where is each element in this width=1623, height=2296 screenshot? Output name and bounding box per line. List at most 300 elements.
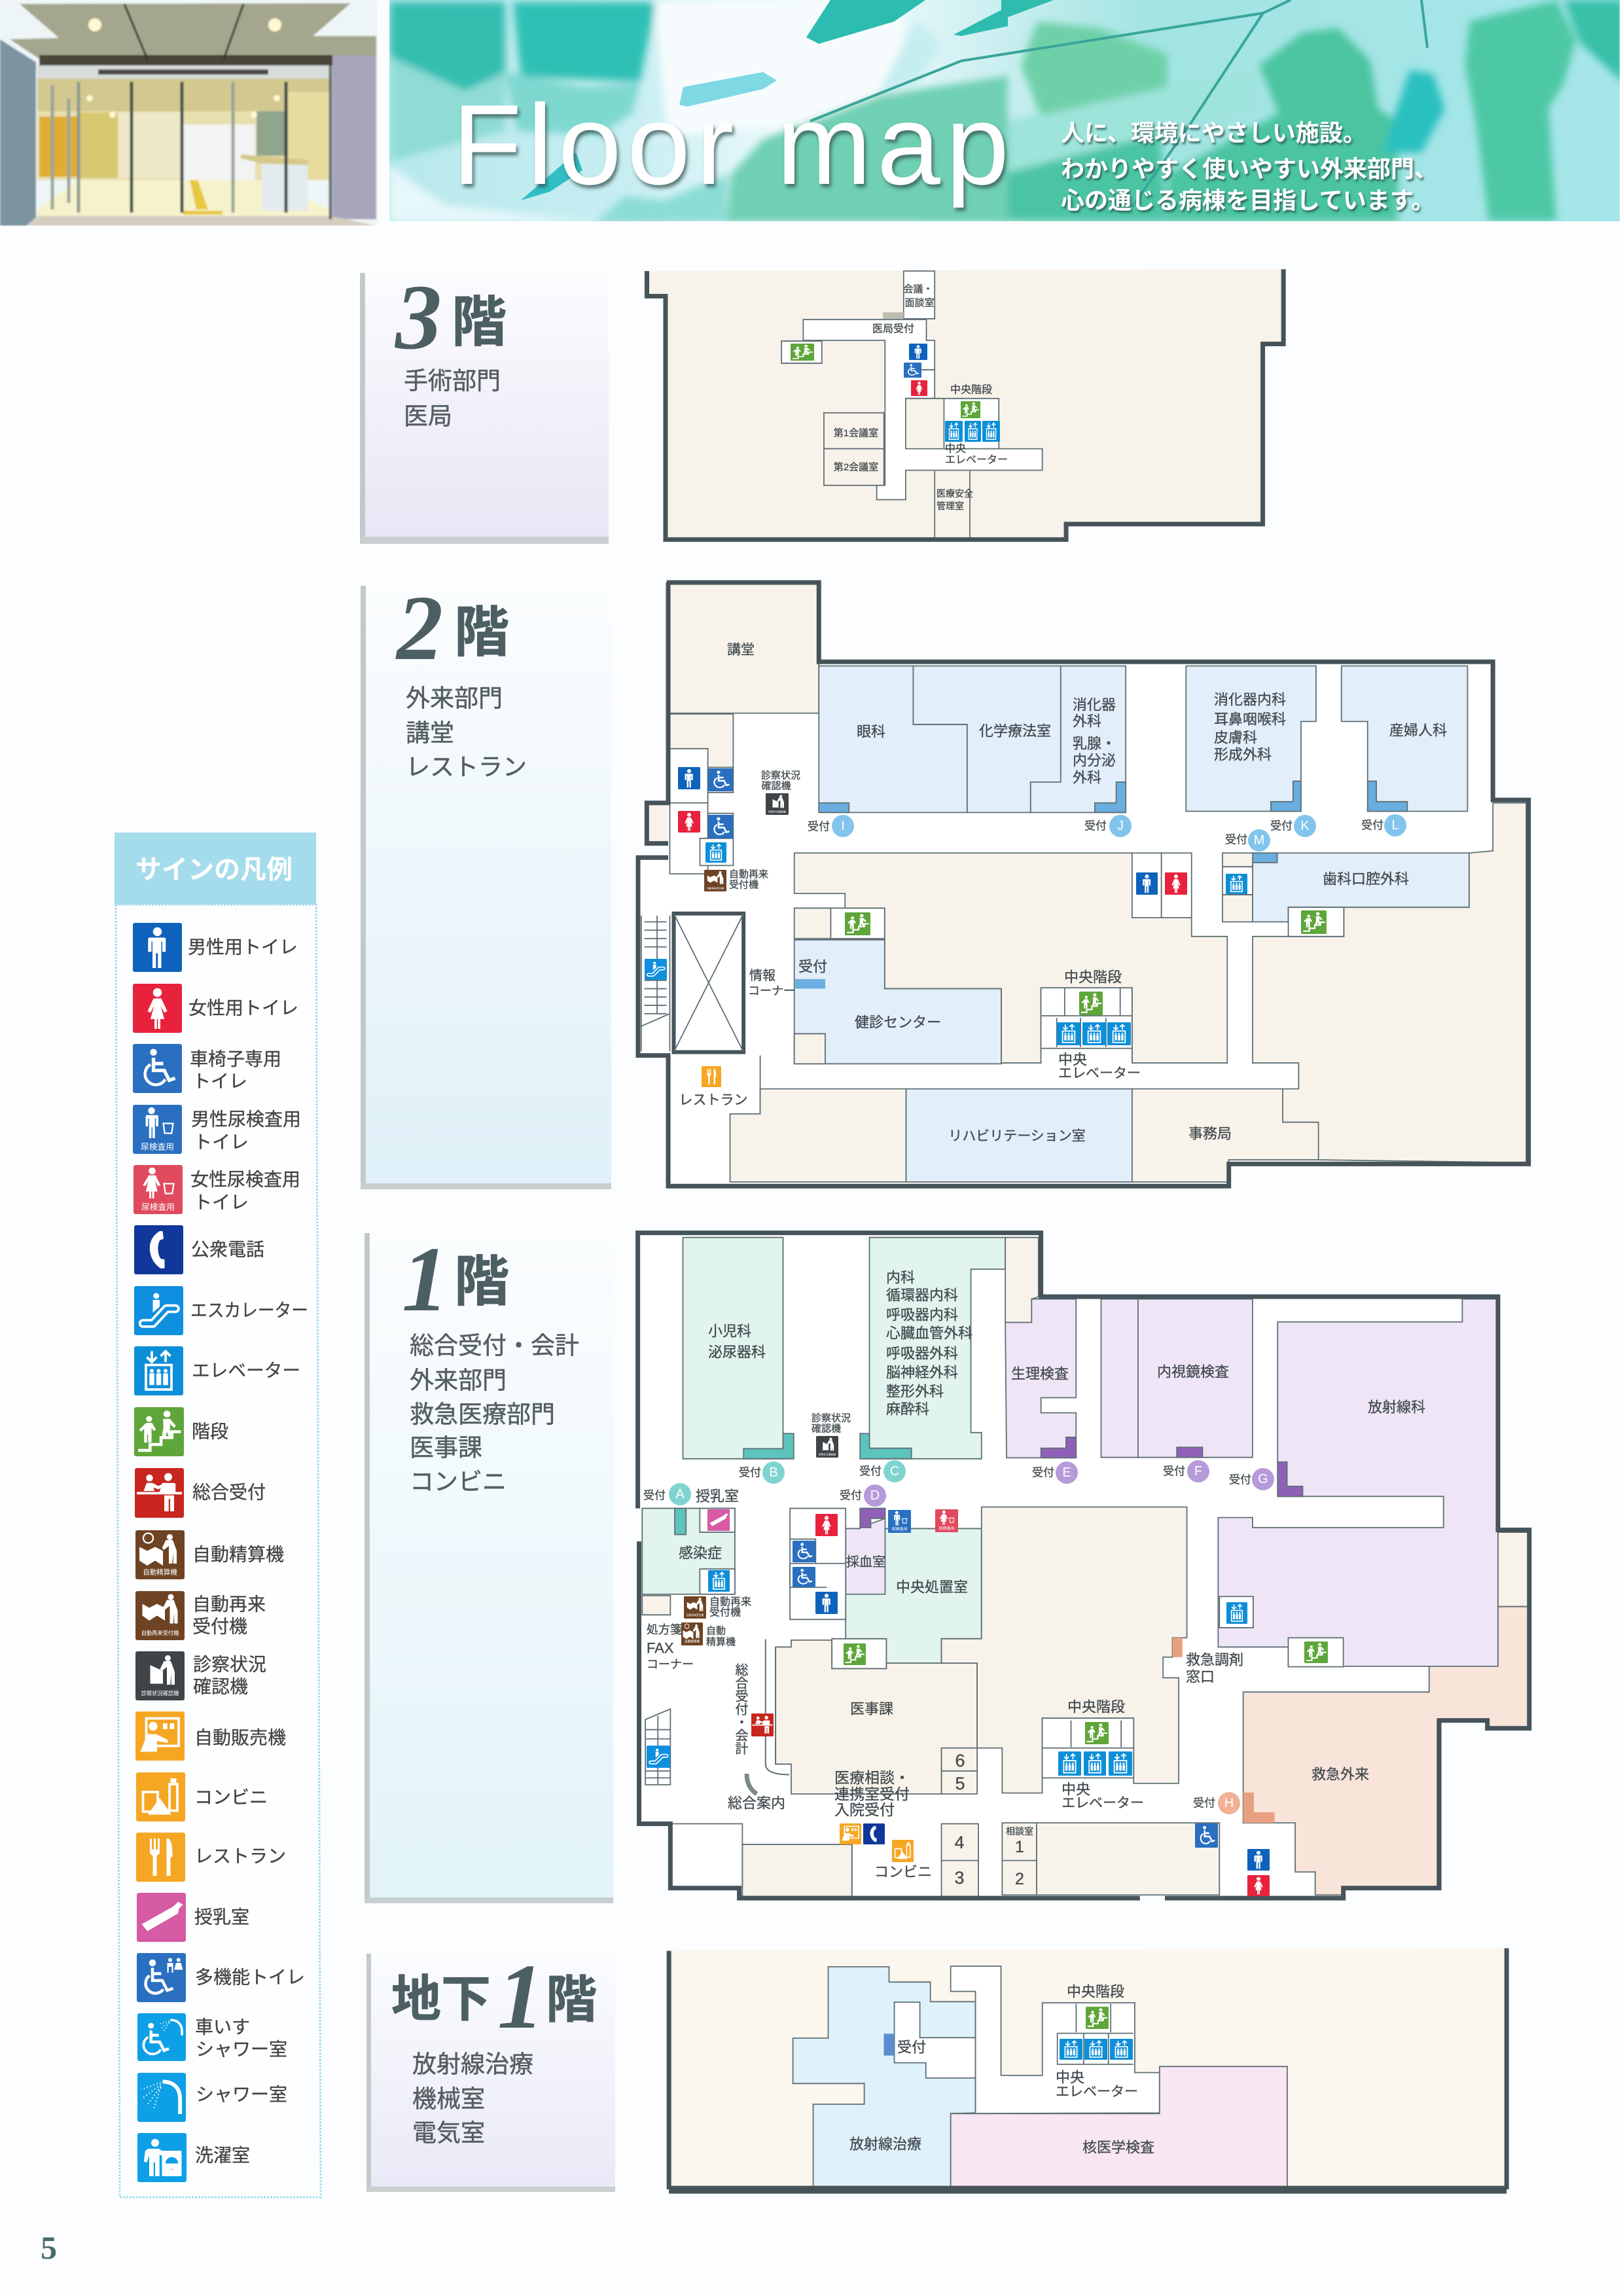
icon: elevator 2 [965,421,981,442]
floor plan: 3F [647,269,1283,539]
reception marker F [1163,1460,1209,1482]
room shapes 2F [638,583,1529,1186]
label 救急調剤窓口 [1186,1652,1243,1685]
heading: 3階: 3 [394,265,442,368]
legend: women's toilet: 女性用トイレ [188,997,298,1018]
basement departments [412,2051,533,2147]
icon: status kiosk [766,793,789,815]
reception marker B: B [769,1465,778,1480]
heading: 地下1階 [391,1945,597,2048]
legend: men's urine-test toilet: 男性尿検査用 [191,1109,301,1130]
icon: elevator 1 [1060,2039,1082,2060]
legend: auto payment: 自動精算機 [192,1545,284,1564]
label 第2会議室: 第2会議室 [834,461,878,473]
heading: 1階 [402,1227,509,1331]
label 自動再来受付機 [709,1596,751,1618]
icon: elevator east [1226,1602,1247,1624]
room shapes 3F [647,269,1283,539]
legend: escalator [134,1286,308,1335]
legend: multipurpose toilet [137,1953,305,2002]
reception marker J: 受付 [1084,819,1107,833]
legend: wheelchair shower [137,2013,287,2061]
legend: re-visit kiosk: 受付機 [192,1617,247,1636]
floor 1 departments: 医事課 [410,1435,482,1461]
label 中央エレベーター [1056,2070,1138,2100]
legend: elevator: エレベーター [192,1360,300,1381]
icon: central stairs [1085,1722,1109,1744]
icon: stairs [844,1643,866,1665]
legend: re-visit kiosk [135,1591,266,1640]
icon: escalator [645,959,667,980]
label 中央エレベーター: エレベーター [1061,1796,1144,1810]
header photo: hospital entrance [0,0,378,226]
legend: reception: 総合受付 [192,1482,266,1503]
label 核医学検査: 核医学検査 [1082,2139,1154,2156]
reception marker A [643,1483,691,1505]
legend: restaurant [136,1833,286,1882]
label 総合案内: 総合案内 [728,1795,785,1812]
label 小児科・泌尿器科: 小児科 [708,1323,751,1339]
label 中央エレベーター: 中央 [1056,2070,1084,2085]
legend: nursing room: 授乳室 [194,1907,249,1927]
icon: men's urine-test toilet [888,1510,911,1533]
icon: accessible toilet [708,768,733,791]
legend: stairs: 階段 [192,1422,228,1441]
label 会議・面談室: 会議・ [903,283,933,295]
label 小児科・泌尿器科 [708,1323,766,1360]
icon: vending machine [840,1823,861,1844]
label 処方箋FAXコーナー: コーナー [647,1658,694,1671]
label 相談室1-2: 相談室 [1006,1826,1033,1837]
label 中央エレベーター [1058,1051,1141,1081]
legend: status kiosk: 確認機 [193,1677,248,1696]
label 消化器内科ほか: 皮膚科 [1214,729,1257,746]
label 自動再来受付機: 自動再来 [709,1596,751,1607]
legend: accessible toilet [133,1044,281,1093]
page number: 5 [41,2229,57,2266]
header title: Floor map [452,81,1009,208]
legend header: サインの凡例 [135,855,293,884]
legend: shower room [137,2073,287,2122]
header tagline: 人に、環境にやさしい施設。 [1061,119,1366,147]
basement departments: 電気室 [412,2119,485,2147]
panel: floor 1 heading [365,1227,613,1903]
label 医療相談・連携室受付・入院受付: 入院受付 [834,1801,895,1818]
icon: elevator west [705,842,726,863]
icon: elevator 3 [982,421,1000,442]
header banner: leaves [389,0,1623,223]
icon: women's toilet [815,1514,838,1536]
icon: auto payment [681,1623,703,1645]
label 中央階段: 中央階段 [1064,969,1122,986]
label 自動再来受付機: 自動再来 [729,869,768,880]
floor plan: 1F [638,1233,1529,1898]
floor plan: 2F [638,583,1529,1186]
panel: sign legend [115,833,321,2197]
legend: re-visit kiosk: 自動再来 [192,1594,266,1614]
label 自動再来受付機: 受付機 [729,880,758,890]
legend: laundry [137,2133,250,2182]
reception marker G: 受付 [1229,1474,1251,1486]
icon: stairs west [791,344,814,361]
icon: public phone [863,1823,885,1844]
label 相談室1-2: 2 [1015,1870,1024,1888]
floor 2 departments: 講堂 [406,720,454,746]
icon: elevator 2 [1084,2039,1107,2060]
panel: floor 2 heading [361,576,611,1189]
icon: central stairs [961,401,980,418]
legend: status kiosk: 診察状況 [193,1655,266,1674]
label 受付 健診: 受付 [798,958,827,975]
reception marker E: E [1062,1465,1071,1480]
label 自動精算機: 自動 [706,1626,726,1636]
label 講堂: 講堂 [727,643,755,657]
label 診察状況確認機: 確認機 [761,780,791,792]
label 救急外来: 救急外来 [1311,1766,1369,1783]
reception marker F: 受付 [1163,1465,1185,1478]
label 自動精算機: 精算機 [706,1636,736,1648]
icon: accessible toilet [708,815,733,838]
label 診察状況確認機: 診察状況 [761,770,800,781]
label 自動精算機 [706,1626,736,1648]
room shapes 1F [638,1233,1529,1898]
legend: public phone [134,1225,264,1274]
reception marker L [1361,814,1406,836]
reception marker C [859,1460,906,1482]
icon: women's toilet [911,380,927,396]
legend: wheelchair shower: 車いす [195,2017,250,2037]
label 医療安全管理室: 医療安全 [936,488,973,499]
reception marker D [840,1484,886,1507]
label 相談室1-2 [1006,1826,1033,1888]
reception marker D: 受付 [840,1490,862,1501]
icon: men's toilet [815,1592,838,1614]
icon: reception [751,1713,774,1736]
icon: accessible toilet [793,1567,815,1587]
label 放射線科: 放射線科 [1368,1399,1425,1415]
label 中央エレベーター: エレベーター [1058,1066,1141,1081]
label 中央エレベーター: 中央 [945,442,966,454]
room numbers 3-6: 3 [954,1868,965,1888]
reception marker C: 受付 [859,1465,882,1478]
icon: central stairs [1086,2007,1109,2029]
reception marker B [739,1462,785,1484]
legend: multipurpose toilet: 多機能トイレ [195,1967,305,1987]
reception marker E: 受付 [1032,1466,1054,1479]
label 消化器外科・乳腺内分泌外科: 外科 [1073,713,1101,729]
label 中央処置室: 中央処置室 [896,1579,968,1596]
icon: re-visit kiosk [684,1596,706,1619]
icon: elevator 3 [1110,2039,1133,2060]
label 処方箋FAXコーナー: FAX [647,1640,674,1656]
label 診察状況確認機 [761,770,800,792]
label 中央階段: 中央階段 [950,384,992,395]
label 中央エレベーター [945,442,1008,466]
legend: stairs [134,1407,228,1456]
reception marker A: 受付 [643,1490,666,1501]
reception marker H: H [1224,1796,1234,1810]
label 医療相談・連携室受付・入院受付 [834,1769,910,1818]
label 消化器内科ほか: 形成外科 [1214,746,1272,763]
label 情報コーナー: コーナー [748,984,795,997]
icon: elevator 1 [945,421,963,442]
label 内科ほか: 心臓血管外科 [886,1325,972,1342]
heading: 2階: 階 [454,601,509,663]
legend: shower room: シャワー室 [196,2084,287,2105]
floor 1 departments: 総合受付・会計 [410,1333,579,1359]
label 消化器外科・乳腺内分泌外科: 消化器 [1073,696,1116,713]
icon: accessible toilet [1195,1823,1218,1848]
label 内視鏡検査: 内視鏡検査 [1157,1364,1229,1380]
label 診察状況確認機: 確認機 [812,1423,841,1435]
floor 1 departments: コンビニ [410,1469,507,1495]
icon: elevator 3 [1107,1022,1131,1045]
legend: accessible toilet: 車椅子専用 [190,1049,281,1069]
label 総合受付・会計: 総合受付・会計 [733,1663,748,1755]
legend: nursing room [137,1893,249,1942]
icon: women's urine-test toilet [935,1509,958,1532]
label 自動再来受付機: 受付機 [709,1606,741,1618]
heading: 2階 [395,576,509,679]
basement departments: 放射線治療 [412,2051,533,2077]
legend: reception [135,1468,266,1518]
label 中央階段: 中央階段 [1067,1983,1124,2000]
reception marker M [1225,829,1270,852]
label 医療安全管理室 [936,488,973,511]
label 中央エレベーター: エレベーター [1056,2084,1138,2100]
legend: status kiosk [135,1651,266,1700]
label 内科ほか: 麻酔科 [886,1401,929,1418]
reception marker I: I [841,819,845,833]
reception marker B: 受付 [739,1466,761,1479]
reception marker K [1270,815,1316,837]
label 産婦人科: 産婦人科 [1389,723,1447,738]
room numbers 3-6: 4 [954,1833,965,1852]
label 中央エレベーター [1061,1782,1144,1810]
icon: accessible toilet [793,1541,815,1562]
reception marker L: L [1391,818,1399,833]
label 医療安全管理室: 管理室 [936,501,964,511]
floor 1 departments: 救急医療部門 [410,1401,555,1428]
icon: convenience store [892,1840,914,1862]
icon: stairs [1301,910,1327,934]
reception marker H: 受付 [1193,1797,1215,1809]
floor 3 departments [404,368,501,429]
reception marker M: M [1254,833,1264,848]
reception marker C: C [890,1464,899,1479]
legend: women's urine-test toilet: トイレ [194,1193,249,1212]
floor 1 departments: 外来部門 [410,1367,507,1394]
floor 1 departments [410,1333,579,1495]
icon: re-visit kiosk [704,870,726,891]
label 中央エレベーター: エレベーター [945,454,1008,466]
label 授乳室: 授乳室 [696,1488,739,1504]
label 会議・面談室: 面談室 [904,297,935,309]
legend: convenience store [136,1772,268,1821]
reception marker H [1193,1792,1240,1814]
label 消化器外科・乳腺内分泌外科 [1073,696,1116,785]
label 採血室: 採血室 [846,1554,885,1570]
label 内科ほか: 内科 [886,1270,915,1285]
icon: restaurant [702,1066,721,1087]
heading: 地下1階: 階 [546,1971,597,2028]
icon: men's toilet [678,767,700,789]
label 相談室1-2: 1 [1015,1838,1024,1856]
label 内科ほか: 呼吸器外科 [886,1346,958,1361]
legend: convenience store: コンビニ [194,1787,268,1808]
panel: floor 3 heading [360,265,609,544]
label 化学療法室: 化学療法室 [979,723,1051,740]
legend: elevator [134,1346,300,1395]
label 受付: 受付 [897,2039,926,2055]
reception marker E [1032,1462,1078,1484]
label 診察状況確認機 [812,1412,851,1435]
label 小児科・泌尿器科: 泌尿器科 [708,1344,766,1360]
label 内科ほか: 脳神経外科 [886,1364,958,1381]
label 中央階段: 中央階段 [1067,1699,1125,1715]
heading: 1階: 1 [402,1227,448,1331]
icon: escalator [647,1746,670,1768]
label コンビニ: コンビニ [874,1864,932,1880]
legend: men's toilet: 男性用トイレ [188,937,298,957]
label 内科ほか [886,1270,972,1418]
legend: accessible toilet: トイレ [192,1071,247,1092]
floor 2 departments: 外来部門 [406,685,503,712]
label 情報コーナー: 情報 [749,968,776,983]
label 医事課: 医事課 [850,1700,893,1717]
label 健診センター: 健診センター [855,1014,941,1030]
label 放射線治療: 放射線治療 [849,2136,921,2152]
header tagline [1061,119,1438,213]
label 会議・面談室 [903,283,935,309]
icon: men's toilet [909,344,927,360]
reception marker K: 受付 [1270,819,1293,833]
label 歯科口腔外科: 歯科口腔外科 [1323,870,1409,888]
label 内科ほか: 循環器内科 [886,1287,958,1304]
icon: stairs [1304,1641,1328,1663]
icon: elevator 3 [1109,1751,1132,1776]
label 消化器内科ほか [1214,691,1286,763]
reception marker J: J [1117,819,1124,833]
icon: nursing room [707,1509,730,1531]
legend: women's toilet [133,984,298,1033]
label 眼科: 眼科 [857,724,885,740]
icon: men's toilet [1247,1849,1270,1871]
icon: men's toilet [1136,872,1158,895]
heading: 2階: 2 [395,576,443,679]
reception marker K: K [1300,819,1310,833]
heading: 3階 [394,265,507,368]
label 処方箋FAXコーナー: 処方箋 [647,1623,682,1636]
label 消化器外科・乳腺内分泌外科: 内分泌 [1073,753,1116,768]
legend: laundry: 洗濯室 [195,2145,250,2165]
floor 3 departments: 医局 [404,403,452,429]
label 中央エレベーター: 中央 [1058,1051,1087,1068]
heading: 3階: 階 [452,291,507,353]
reception marker I [808,815,854,837]
icon: central stairs [1079,992,1103,1015]
legend: men's urine-test toilet: トイレ [194,1132,249,1152]
floor 3 departments: 手術部門 [404,368,501,394]
icon: elevator 1 [1058,1751,1081,1776]
label 消化器外科・乳腺内分泌外科: 乳腺・ [1073,736,1116,751]
floor plan: B1 [669,1948,1507,2191]
label 消化器外科・乳腺内分泌外科: 外科 [1073,770,1101,785]
reception marker G [1229,1468,1274,1490]
panel: basement floor heading [366,1945,615,2192]
legend: wheelchair shower: シャワー室 [196,2039,287,2059]
legend: men's toilet [133,923,298,972]
room shapes B1 [669,1948,1507,2191]
reception marker I: 受付 [808,821,830,833]
header tagline: わかりやすく使いやすい外来部門、 [1061,156,1438,182]
label 第1会議室: 第1会議室 [834,427,878,439]
legend header [115,833,316,905]
legend: auto payment [135,1530,284,1579]
heading: 地下1階: 1 [497,1945,544,2048]
basement departments: 機械室 [412,2085,485,2113]
label リハビリテーション室: リハビリテーション室 [948,1128,1086,1144]
label 事務局: 事務局 [1188,1126,1232,1141]
label 自動再来受付機 [729,869,768,890]
legend: vending machine [135,1712,286,1761]
icon: elevator 2 [1084,1751,1106,1776]
floor 2 departments [406,685,527,780]
reception marker F: F [1194,1464,1202,1479]
room numbers 3-6: 6 [955,1751,965,1770]
reception marker L: 受付 [1361,819,1383,831]
label 中央エレベーター: 中央 [1061,1782,1090,1797]
label 処方箋FAXコーナー [647,1623,694,1671]
label 内科ほか: 呼吸器内科 [886,1306,958,1323]
label レストラン: レストラン [679,1093,747,1107]
label 医局受付: 医局受付 [872,323,914,335]
label 感染症: 感染症 [679,1545,722,1562]
label 診察状況確認機: 診察状況 [812,1412,851,1424]
icon: status kiosk [816,1436,838,1458]
icon: elevator 2 [1082,1022,1106,1045]
room numbers 3-6: 5 [955,1774,965,1793]
icon: women's toilet [1165,872,1187,895]
legend: women's urine-test toilet [134,1165,300,1214]
legend: public phone: 公衆電話 [191,1240,264,1259]
icon: women's toilet [678,811,700,833]
label 救急調剤窓口: 窓口 [1186,1669,1215,1685]
label 医療相談・連携室受付・入院受付: 医療相談・ [834,1769,910,1786]
reception marker J [1084,815,1132,837]
icon: accessible toilet [904,363,921,378]
reception marker A: A [675,1487,685,1501]
label 情報コーナー [748,968,795,997]
icon: women's toilet [1247,1875,1270,1896]
floor 2 departments: レストラン [406,754,527,780]
header tagline: 心の通じる病棟を目指しています。 [1061,187,1435,213]
icon: elevator 1 [1057,1022,1080,1045]
legend: vending machine: 自動販売機 [194,1728,286,1748]
label 消化器内科ほか: 耳鼻咽喉科 [1214,711,1286,728]
label 消化器内科ほか: 消化器内科 [1214,691,1286,708]
legend: escalator: エスカレーター [190,1300,308,1321]
heading: 1階: 階 [454,1251,509,1312]
label 救急調剤窓口: 救急調剤 [1186,1652,1243,1668]
legend: women's urine-test toilet: 女性尿検査用 [190,1169,300,1190]
legend: men's urine-test toilet [133,1105,301,1154]
label 内科ほか: 整形外科 [886,1384,944,1399]
label 生理検査: 生理検査 [1011,1365,1069,1382]
room numbers 3-6 [954,1751,965,1888]
heading: 地下1階: 地下 [391,1971,491,2028]
icon: elevator [708,1570,730,1592]
